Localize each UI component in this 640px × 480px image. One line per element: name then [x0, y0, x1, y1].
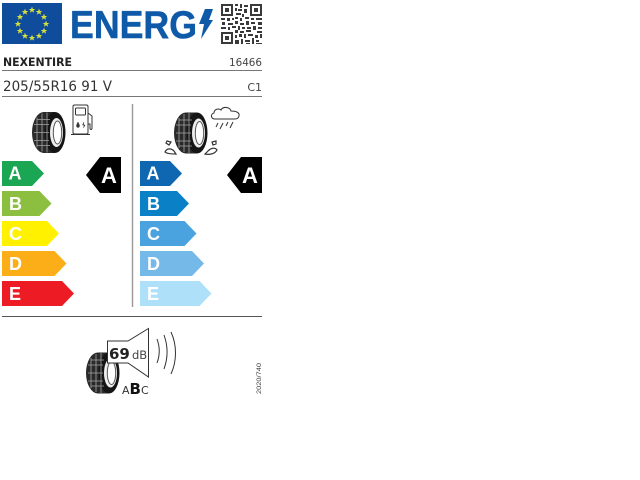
article number: 16466 — [229, 56, 262, 69]
wet grip rating badge: A — [242, 163, 258, 188]
fuel class D: D — [9, 254, 22, 274]
wet class C: C — [147, 224, 160, 244]
fuel class E — [2, 281, 74, 306]
brand name: NEXENTIRE — [3, 55, 72, 69]
fuel class B: B — [9, 194, 22, 214]
icon: QR code — [221, 4, 262, 44]
rating scale: wet grip — [140, 161, 212, 306]
icon: lightning bolt — [199, 9, 213, 39]
fuel class A: A — [8, 164, 22, 184]
icon: fuel pump — [71, 105, 92, 134]
tyre size: 205/55R16 91 V — [3, 79, 112, 95]
fuel class D — [2, 251, 66, 276]
wet class B — [140, 191, 189, 216]
fuel class C — [2, 221, 59, 246]
fuel rating badge: A — [101, 163, 117, 188]
wet class E: E — [147, 284, 159, 304]
wet class D — [140, 251, 204, 276]
wet class C — [140, 221, 196, 246]
tyre class: C1 — [247, 81, 262, 94]
panel: wet grip — [140, 107, 262, 306]
fuel class A — [2, 161, 44, 186]
rating scale: fuel — [2, 161, 74, 306]
regulation number: 2020/740 — [256, 363, 263, 394]
panel: fuel efficiency — [2, 105, 121, 306]
fuel class C: C — [9, 224, 22, 244]
wet class D: D — [147, 254, 160, 274]
wet class A: A — [146, 164, 160, 184]
icon: speaker — [108, 328, 148, 377]
fuel rating badge — [86, 157, 121, 193]
fuel class B — [2, 191, 52, 216]
wet class B: B — [147, 194, 160, 214]
icon: noise tyre — [86, 352, 120, 394]
noise unit: dB — [132, 348, 147, 362]
icon: sound waves — [157, 332, 176, 374]
fuel class E: E — [9, 284, 21, 304]
wet class A — [140, 161, 182, 186]
wet class E — [140, 281, 212, 306]
icon: EU flag — [2, 3, 62, 44]
icon: water splashes — [165, 141, 217, 154]
noise class: ABC — [122, 380, 149, 398]
title: ENERG wordmark: ENERG — [70, 4, 197, 47]
icon: fuel tyre — [32, 112, 66, 153]
icon: wet tyre — [174, 112, 208, 154]
noise value: 69 — [109, 345, 130, 363]
wet grip rating badge — [227, 157, 262, 193]
panel: external rolling noise — [86, 328, 176, 398]
icon: rain cloud — [211, 107, 239, 129]
